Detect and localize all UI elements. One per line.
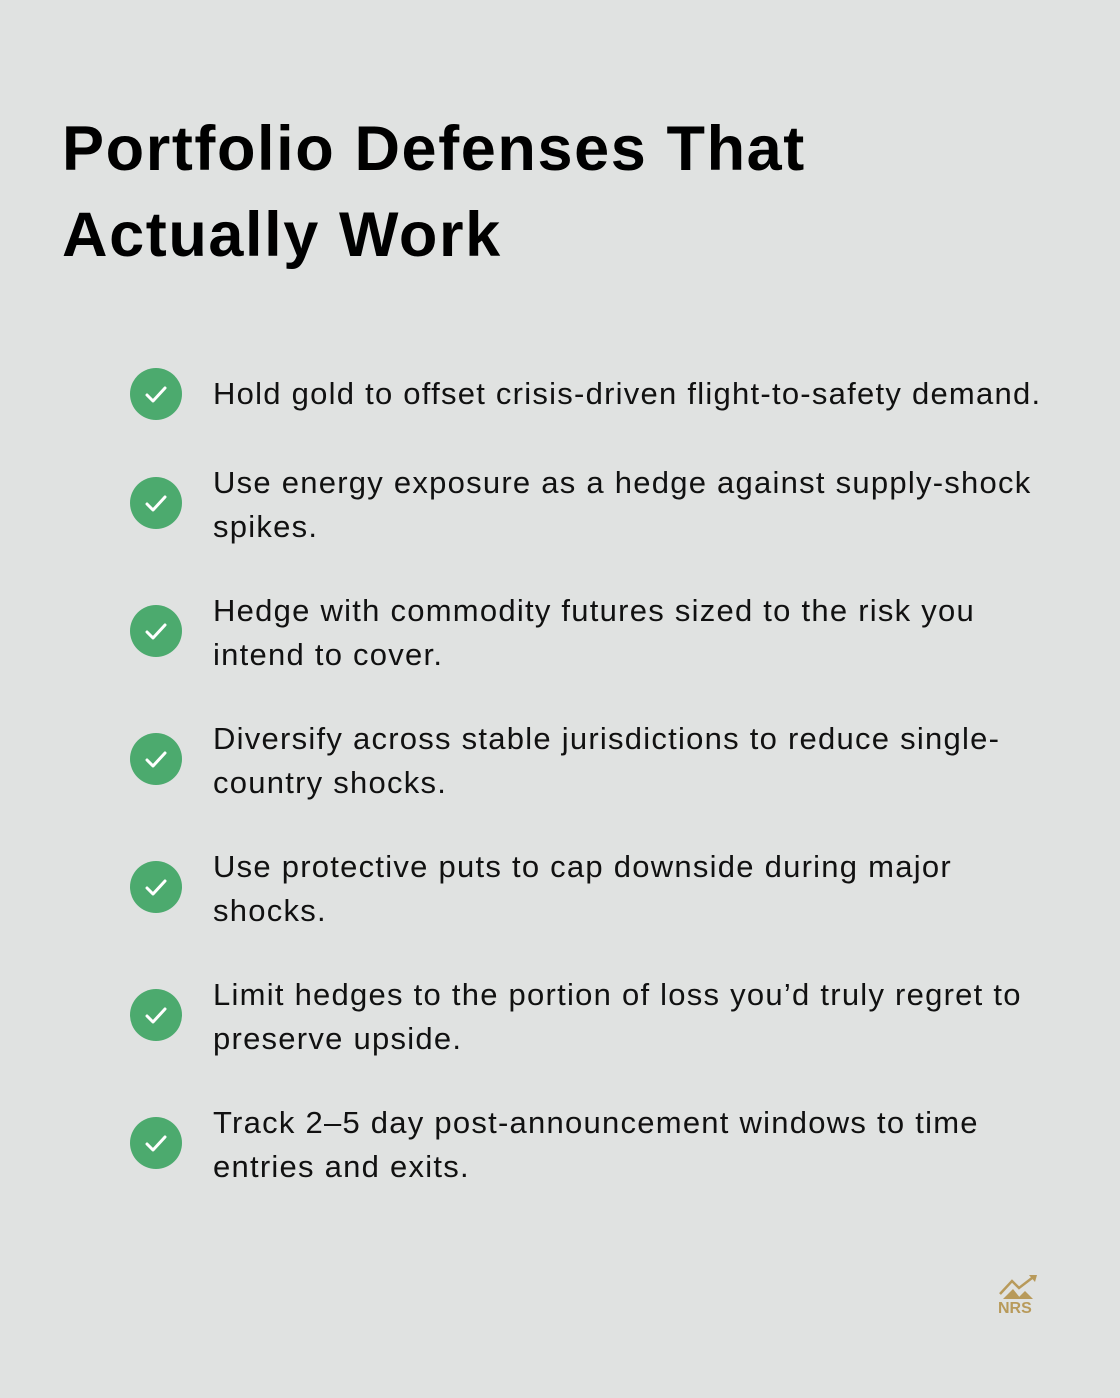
text [213, 593, 975, 672]
icon: check [130, 605, 182, 657]
text: spikes. [213, 509, 318, 544]
logo: NRS [998, 1275, 1037, 1316]
text: Hold gold to offset crisis-driven flight-to-safety demand. [213, 376, 1041, 411]
icon: check [130, 733, 182, 785]
item 7 [130, 1105, 979, 1184]
text: Hedge with commodity futures sized to the risk you [213, 593, 975, 628]
icon: check [130, 368, 182, 420]
icon: check [130, 1117, 182, 1169]
text [213, 721, 1000, 800]
item 6 [130, 977, 1022, 1056]
title: Actually Work [62, 200, 502, 270]
text [213, 465, 1032, 544]
item 1 [130, 368, 1041, 420]
item 5 [130, 849, 952, 928]
text: Use energy exposure as a hedge against supply-shock [213, 465, 1032, 500]
text: preserve upside. [213, 1021, 462, 1056]
icon: check [130, 477, 182, 529]
text [213, 977, 1022, 1056]
text: Limit hedges to the portion of loss you’d truly regret to [213, 977, 1022, 1012]
text: entries and exits. [213, 1149, 470, 1184]
icon: check [130, 861, 182, 913]
text: Diversify across stable jurisdictions to reduce single- [213, 721, 1000, 756]
title: Portfolio Defenses That [62, 114, 806, 184]
item 2 [130, 465, 1032, 544]
text: country shocks. [213, 765, 447, 800]
title [62, 114, 806, 270]
text [213, 849, 952, 928]
item 4 [130, 721, 1000, 800]
item 3 [130, 593, 975, 672]
text: Use protective puts to cap downside during major [213, 849, 952, 884]
text: shocks. [213, 893, 327, 928]
text: intend to cover. [213, 637, 443, 672]
text: Track 2–5 day post-announcement windows to time [213, 1105, 979, 1140]
text [213, 1105, 979, 1184]
icon: check [130, 989, 182, 1041]
